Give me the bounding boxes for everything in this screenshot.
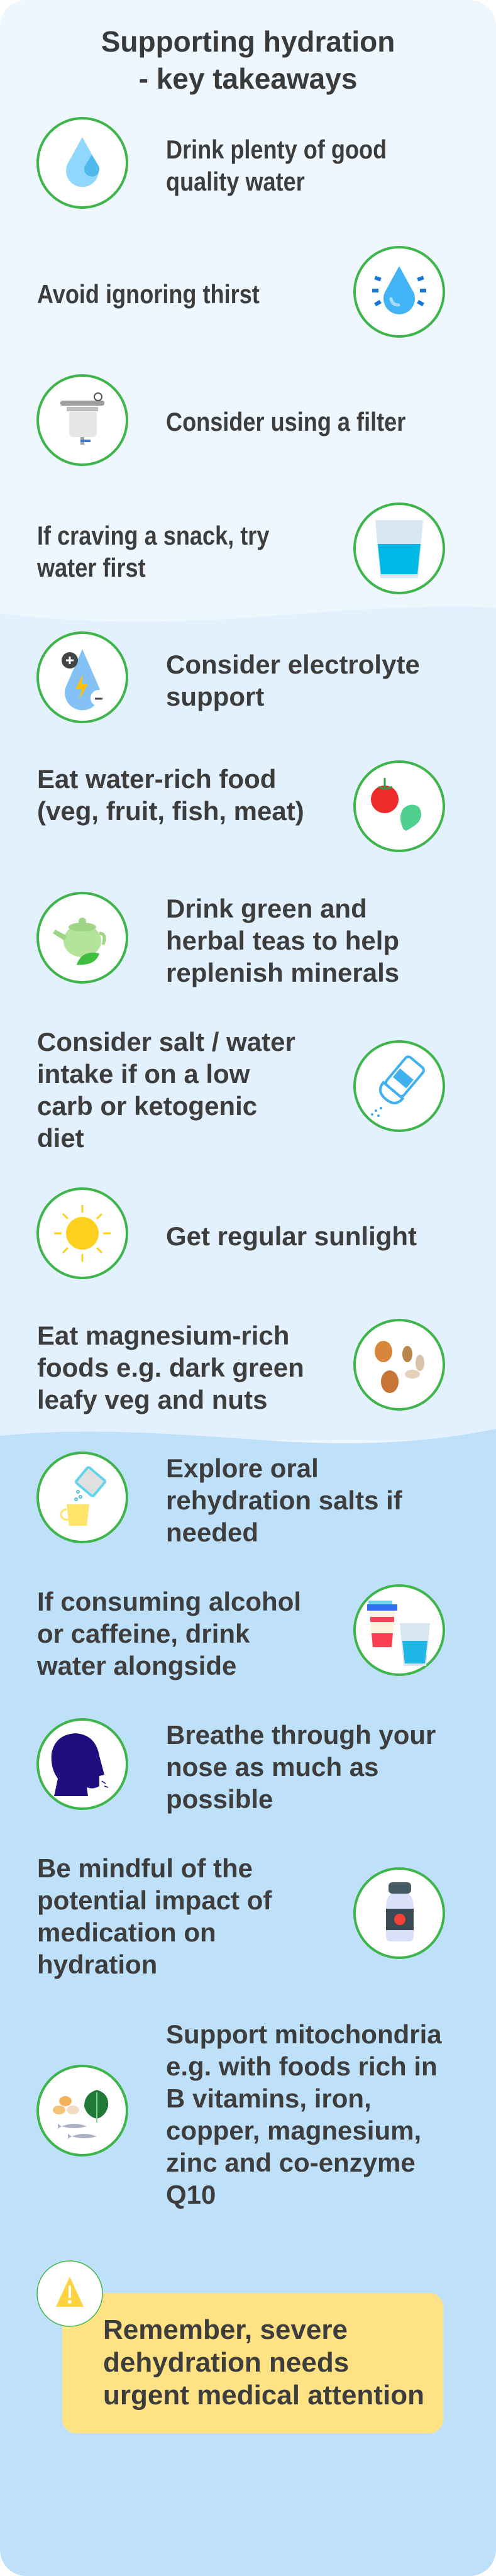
icon: salts packet and cup xyxy=(36,1452,128,1543)
text xyxy=(166,135,387,196)
icon: water drops xyxy=(36,117,128,209)
text xyxy=(166,650,420,711)
text: If consuming alcohol xyxy=(37,1587,301,1616)
row 12: alcohol or caffeine xyxy=(36,1584,445,1680)
title: - key takeaways xyxy=(139,62,357,95)
text: copper, magnesium, xyxy=(166,2116,421,2145)
text: e.g. with foods rich in xyxy=(166,2051,438,2081)
callout text: dehydration needs xyxy=(103,2347,349,2378)
text: Drink green and xyxy=(166,894,367,923)
text: Consider using a filter xyxy=(166,407,405,436)
text: Drink plenty of good xyxy=(166,135,387,164)
icon: electrolyte drop xyxy=(36,631,128,723)
title: Supporting hydration xyxy=(101,25,395,58)
row 11: oral rehydration salts xyxy=(36,1452,402,1547)
icon: beans, greens and fish xyxy=(36,2065,128,2157)
text: Be mindful of the xyxy=(37,1853,253,1883)
callout text xyxy=(103,2314,424,2412)
text: carb or ketogenic xyxy=(37,1091,257,1121)
text: medication on xyxy=(37,1918,216,1947)
text xyxy=(37,1321,304,1414)
icon: drop with rays xyxy=(353,246,445,338)
text: possible xyxy=(166,1784,273,1814)
text: intake if on a low xyxy=(37,1059,250,1089)
text: nose as much as xyxy=(166,1752,378,1782)
icon: head silhouette xyxy=(36,1718,128,1810)
icon: tomato and lettuce xyxy=(353,760,445,852)
text: If craving a snack, try xyxy=(37,521,269,550)
text: B vitamins, iron, xyxy=(166,2084,372,2113)
text: Avoid ignoring thirst xyxy=(37,279,260,309)
text xyxy=(37,1853,272,1979)
text: Eat water-rich food xyxy=(37,764,276,794)
icon: coffee cup and glass xyxy=(353,1584,445,1676)
row 10: magnesium xyxy=(37,1319,445,1414)
row 13: nose breathing xyxy=(36,1718,436,1814)
row 2: thirst xyxy=(37,246,445,338)
text: Breathe through your xyxy=(166,1720,436,1750)
icon: warning xyxy=(36,2260,103,2327)
text xyxy=(166,2018,442,2211)
text: Consider salt / water xyxy=(37,1027,295,1057)
text: or caffeine, drink xyxy=(37,1619,250,1648)
text: potential impact of xyxy=(37,1885,272,1915)
text: water alongside xyxy=(37,1651,236,1680)
text: Q10 xyxy=(166,2180,216,2209)
text: Explore oral xyxy=(166,1453,319,1483)
text xyxy=(166,1453,402,1547)
text: foods e.g. dark green xyxy=(37,1353,304,1382)
icon: teapot xyxy=(36,892,128,984)
text: zinc and co-enzyme xyxy=(166,2148,416,2177)
text: (veg, fruit, fish, meat) xyxy=(37,796,304,826)
text: quality water xyxy=(166,167,305,196)
row 3: filter xyxy=(36,374,405,466)
text xyxy=(36,521,269,582)
text: herbal teas to help xyxy=(166,926,399,955)
row 15: mitochondria xyxy=(0,2018,496,2211)
text: needed xyxy=(166,1518,258,1547)
text xyxy=(37,1027,295,1153)
text xyxy=(37,764,304,826)
icon: glass of water xyxy=(353,502,445,594)
row 14: medication xyxy=(37,1853,445,1979)
icon: medicine bottle xyxy=(353,1867,445,1959)
text: hydration xyxy=(37,1950,157,1979)
title xyxy=(101,25,395,95)
text: Consider electrolyte xyxy=(166,650,420,679)
icon: salt shaker xyxy=(353,1040,445,1132)
row 5: electrolytes xyxy=(36,631,420,723)
text: Support mitochondria xyxy=(166,2019,442,2049)
row 6: water-rich food xyxy=(37,760,445,852)
callout text: urgent medical attention xyxy=(103,2380,424,2411)
text: Get regular sunlight xyxy=(166,1221,417,1251)
text xyxy=(166,894,399,987)
icon: nuts xyxy=(353,1319,445,1411)
row 1: drink water xyxy=(36,117,387,209)
callout text: Remember, severe xyxy=(103,2314,348,2345)
text: water first xyxy=(37,553,146,582)
icon: water filter xyxy=(36,374,128,466)
text xyxy=(166,1720,436,1814)
text: diet xyxy=(37,1123,84,1153)
text: replenish minerals xyxy=(166,958,399,987)
row 7: teas xyxy=(36,892,399,987)
row 9: sunlight xyxy=(36,1187,417,1279)
row 8: salt / low carb xyxy=(37,1027,445,1153)
text xyxy=(36,1587,301,1680)
text: Eat magnesium-rich xyxy=(37,1321,289,1350)
text: rehydration salts if xyxy=(166,1485,402,1515)
text: support xyxy=(166,682,264,711)
row 4: snack xyxy=(36,502,445,594)
callout: medical attention xyxy=(36,2260,444,2434)
text: leafy veg and nuts xyxy=(37,1385,267,1414)
callout box xyxy=(62,2293,443,2433)
icon: sun xyxy=(36,1187,128,1279)
